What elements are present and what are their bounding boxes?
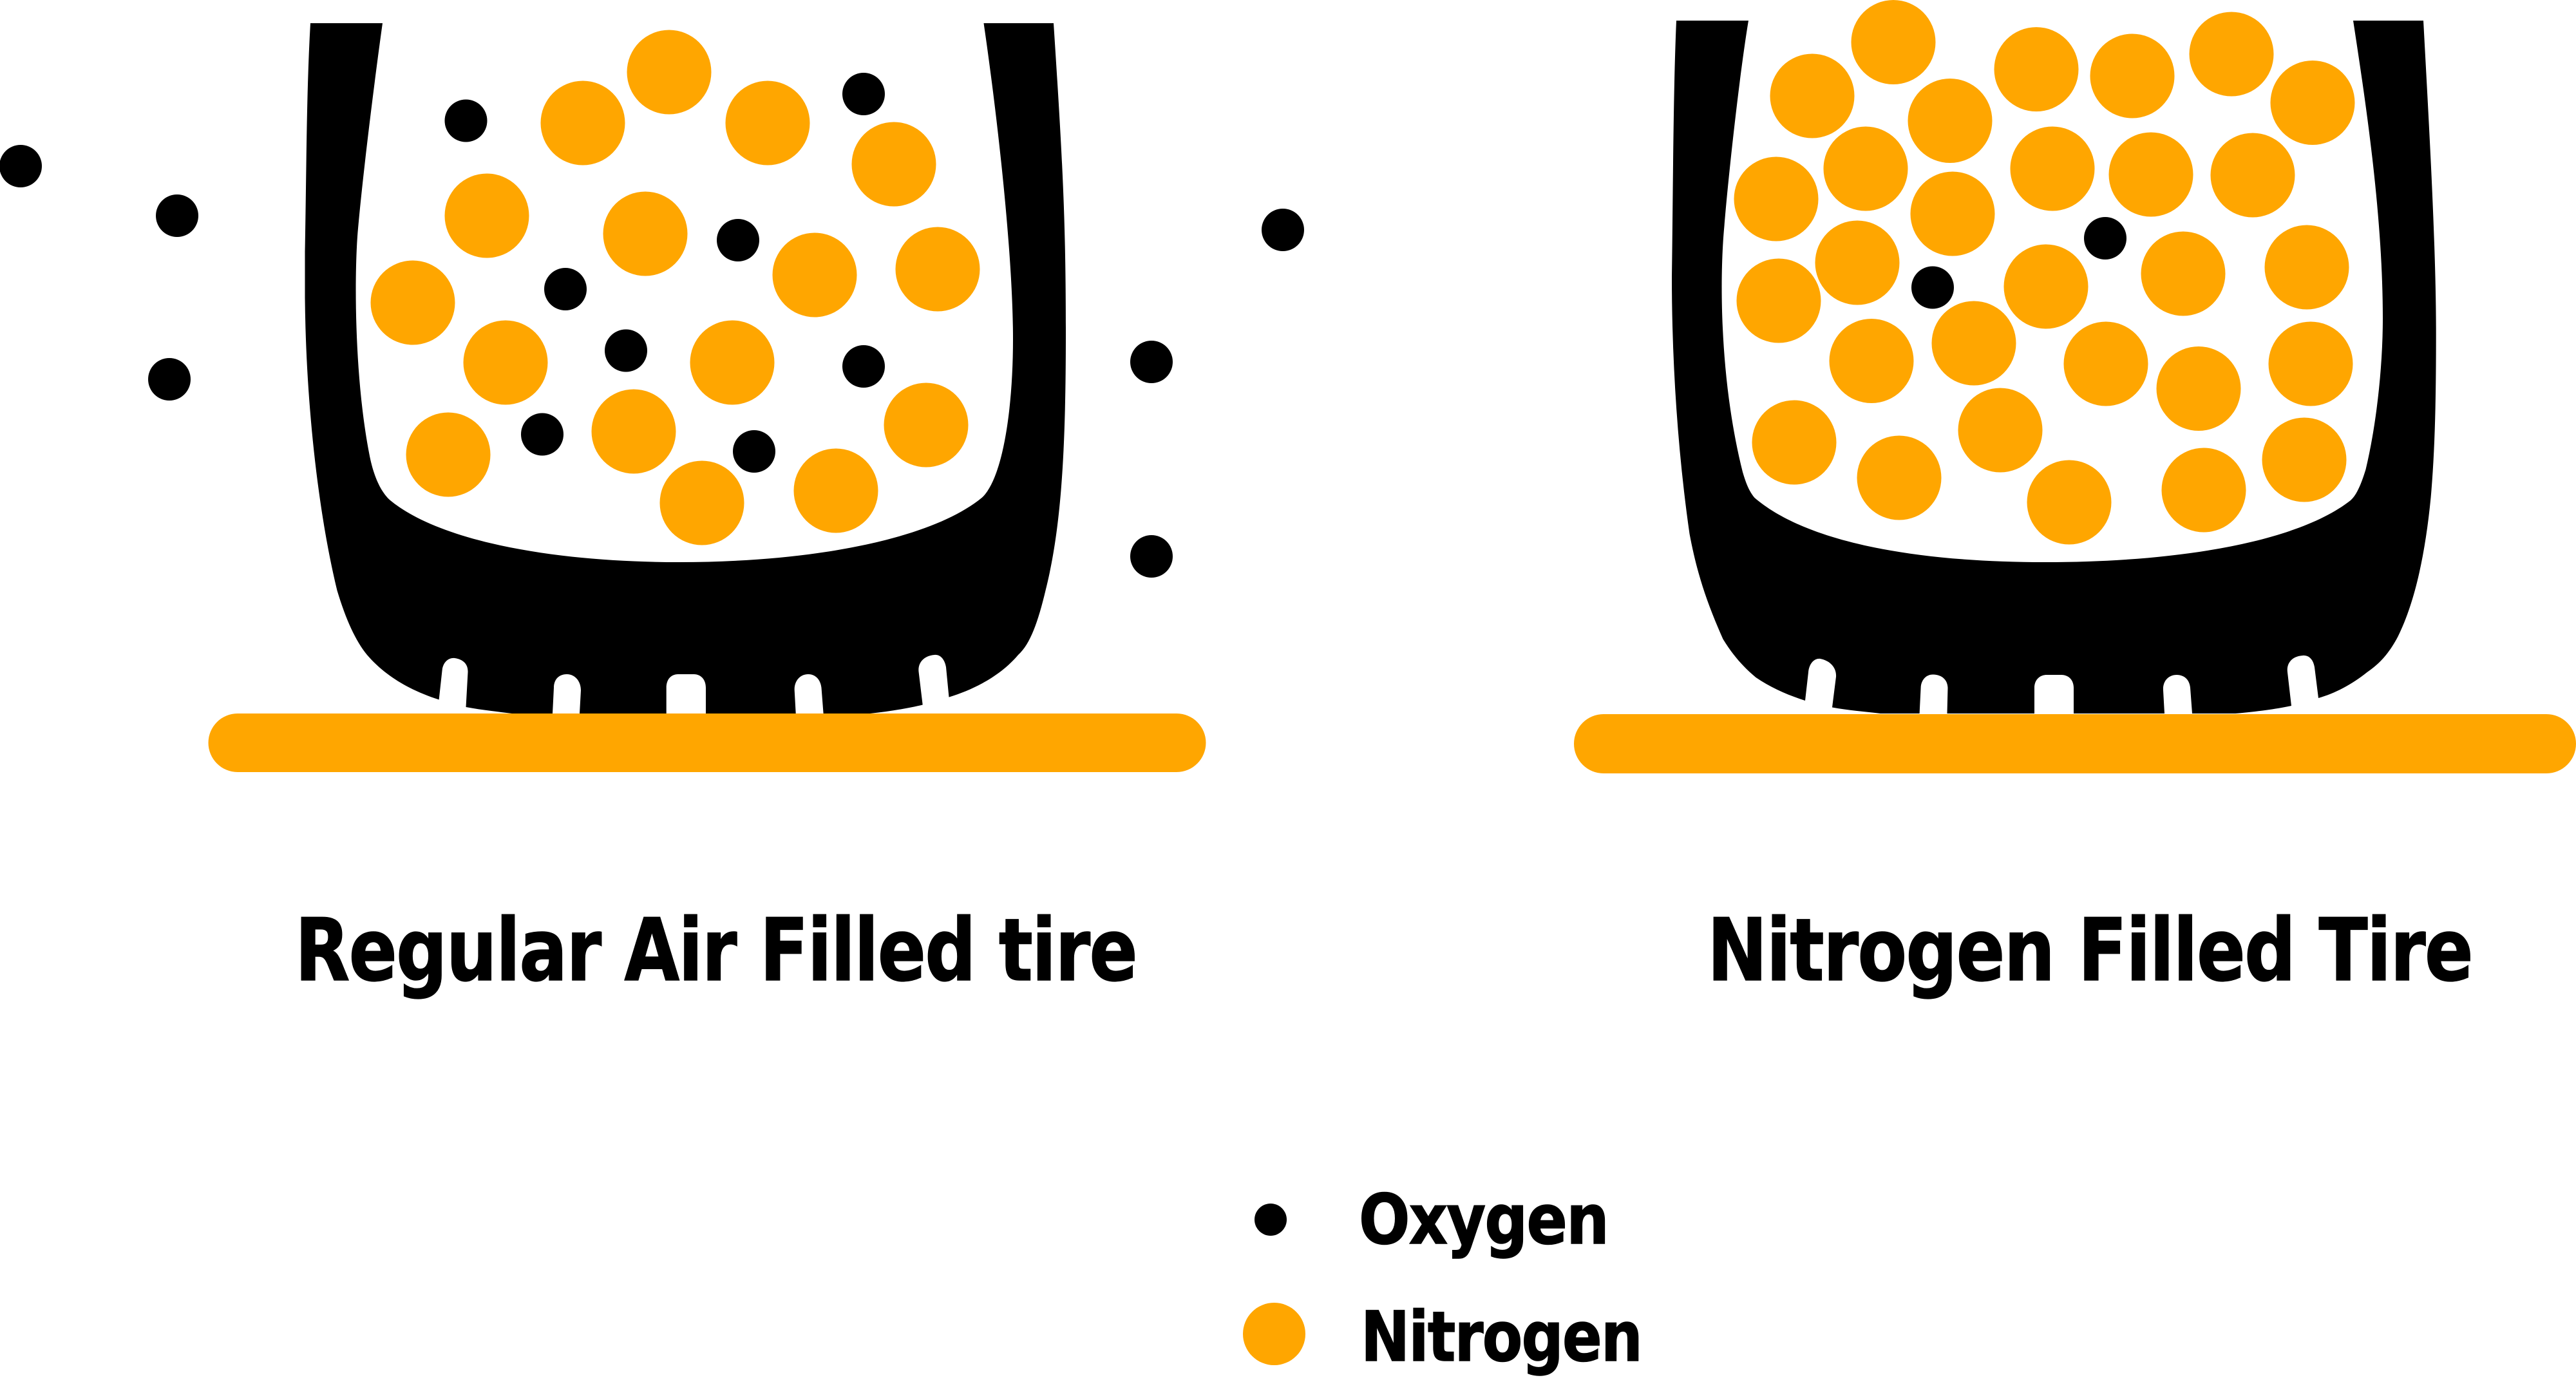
legend <box>1243 1180 1642 1377</box>
oxygen molecules escaping left tire <box>0 145 1304 578</box>
nitrogen molecules, right tire <box>1734 0 2354 545</box>
road surface, right <box>1574 714 2576 773</box>
oxygen molecules inside left tire <box>444 73 885 473</box>
road surface, left <box>209 713 1206 772</box>
legend item: nitrogen <box>1243 1298 1642 1377</box>
icon: tire cross-section, left <box>305 23 1066 713</box>
icon: tire cross-section, right <box>1672 21 2436 713</box>
heading: regular air filled tire: Regular Air Filled tire <box>295 900 1137 1001</box>
legend item: nitrogen: Nitrogen <box>1361 1298 1642 1377</box>
panel: nitrogen filled tire <box>1574 0 2576 1001</box>
nitrogen molecules, left tire <box>371 30 980 545</box>
legend item: oxygen <box>1255 1180 1608 1260</box>
panel: regular air filled tire <box>0 23 1304 1001</box>
oxygen molecules, right tire <box>1911 217 2126 309</box>
legend item: oxygen: Oxygen <box>1359 1180 1608 1260</box>
